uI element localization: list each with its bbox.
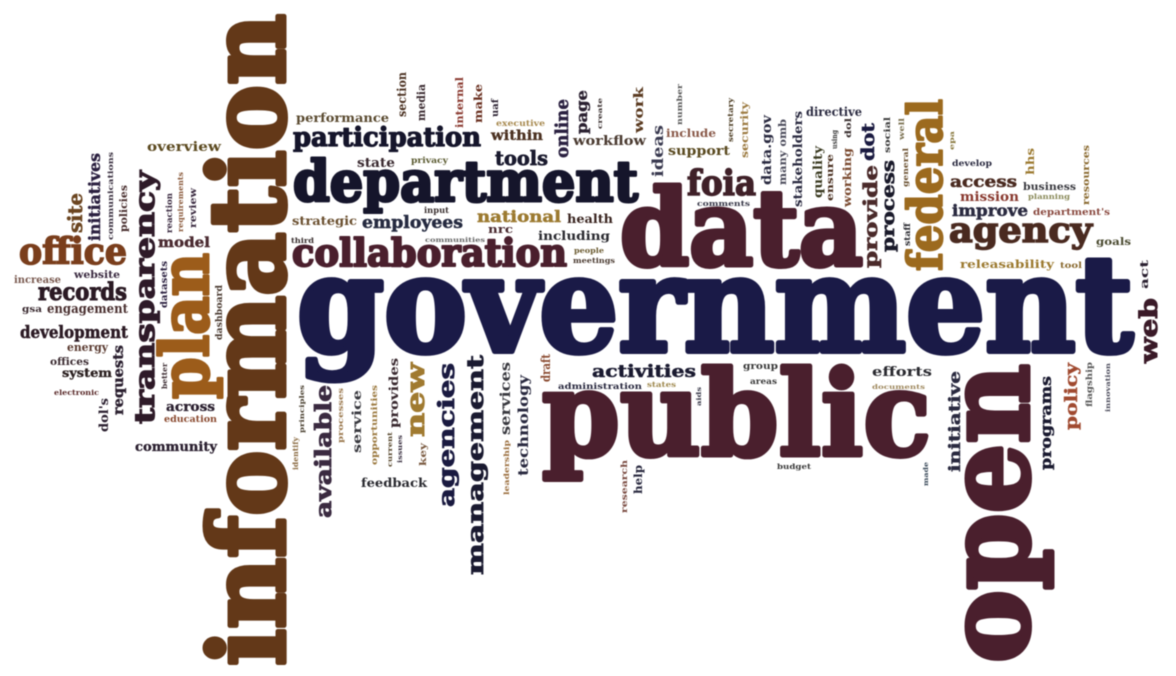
word: development: development (20, 323, 128, 343)
word: feedback: feedback (361, 476, 428, 490)
word: administration: administration (558, 381, 642, 391)
word: agency: agency (949, 210, 1094, 251)
word: national: national (477, 207, 561, 226)
word: datasets: datasets (160, 261, 170, 308)
word: tools: tools (495, 146, 548, 170)
word: process: process (878, 160, 899, 252)
word: management: management (463, 354, 489, 575)
word: opportunities: opportunities (369, 384, 379, 465)
word: online: online (552, 99, 573, 158)
word: processes: processes (336, 388, 345, 443)
word: provide: provide (860, 165, 882, 268)
word: programs: programs (1037, 376, 1055, 470)
word: aids: aids (696, 386, 703, 406)
word: using: using (830, 130, 839, 149)
word: budget: budget (777, 462, 812, 471)
word: efforts: efforts (872, 365, 932, 380)
word: collaboration: collaboration (292, 230, 567, 275)
word: comments: comments (697, 199, 750, 208)
word: communications: communications (106, 152, 115, 240)
word: gsa: gsa (22, 305, 42, 315)
word: system: system (62, 366, 112, 380)
word: increase: increase (14, 275, 61, 286)
word: government: government (297, 227, 1133, 383)
word: requirements: requirements (176, 172, 185, 232)
word: create: create (597, 98, 604, 129)
word: identify: identify (291, 436, 300, 470)
word: support: support (668, 144, 730, 159)
word: department: department (293, 149, 638, 215)
word: principles: principles (299, 384, 306, 433)
word: internal: internal (455, 77, 466, 128)
word: directive: directive (806, 105, 862, 119)
word: plan: plan (146, 253, 224, 399)
word: community: community (135, 440, 217, 455)
word: states: states (647, 380, 676, 389)
word: people: people (574, 246, 605, 255)
word: develop: develop (952, 158, 992, 168)
word: agencies: agencies (434, 363, 460, 507)
word: work: work (632, 86, 647, 134)
word: mission: mission (960, 190, 1020, 205)
word: public: public (542, 345, 931, 483)
word: initiative: initiative (945, 371, 964, 472)
word: include: include (666, 127, 716, 140)
word: electronic: electronic (54, 388, 99, 397)
word: areas: areas (750, 376, 778, 386)
word: ideas: ideas (649, 125, 667, 177)
word: uaf: uaf (491, 98, 501, 117)
word: stakeholders: stakeholders (791, 111, 805, 207)
word: within: within (490, 128, 543, 144)
word: activities: activities (592, 362, 696, 382)
word: working: working (841, 148, 854, 208)
word: staff: staff (902, 223, 912, 246)
word: department's: department's (1033, 208, 1110, 218)
word: policy: policy (1062, 362, 1082, 430)
word: issues: issues (397, 434, 404, 463)
word: performance: performance (296, 111, 389, 125)
word: services: services (498, 362, 514, 435)
word: new: new (401, 361, 430, 437)
word: including: including (538, 229, 611, 243)
word: current: current (387, 432, 394, 467)
word: flagship: flagship (1084, 361, 1094, 407)
word: state: state (357, 156, 395, 171)
word: goals: goals (1096, 237, 1131, 248)
word: innovation: innovation (1105, 362, 1112, 412)
word: input: input (424, 205, 449, 215)
word: social: social (882, 117, 892, 153)
word: key: key (419, 442, 429, 466)
word: quality: quality (811, 145, 825, 198)
word: communities: communities (425, 237, 486, 244)
word: records: records (38, 277, 127, 306)
word: employees: employees (362, 213, 463, 233)
word: privacy: privacy (411, 155, 448, 165)
word: open: open (921, 364, 1055, 663)
word: planning: planning (1028, 192, 1070, 201)
word: dol: dol (843, 118, 853, 138)
word: federal: federal (898, 99, 954, 271)
word: policies: policies (119, 185, 130, 232)
word: provides: provides (387, 358, 401, 428)
word: site: site (63, 193, 87, 233)
word: foia: foia (687, 163, 756, 204)
word: reaction: reaction (164, 193, 174, 233)
word: improve: improve (952, 201, 1028, 220)
word: data: data (620, 166, 863, 290)
word: made: made (923, 462, 930, 486)
word: dashboard: dashboard (215, 284, 225, 340)
word: meetings: meetings (573, 256, 615, 265)
word: documents: documents (872, 384, 926, 391)
word: many omb: many omb (778, 119, 789, 185)
word: research: research (619, 460, 629, 513)
word: data.gov: data.gov (760, 115, 775, 185)
word: dot: dot (858, 122, 879, 161)
word: general: general (901, 148, 910, 187)
word: media: media (415, 84, 428, 121)
word: education: education (164, 415, 217, 425)
word: across: across (166, 400, 215, 415)
word: health: health (567, 212, 613, 226)
word: releasability: releasability (960, 258, 1055, 271)
word: better: better (160, 363, 169, 389)
word: leadership: leadership (502, 440, 511, 495)
word: epa: epa (949, 131, 956, 150)
word: well: well (897, 118, 906, 141)
word: draft: draft (539, 354, 553, 382)
word: business: business (1023, 182, 1076, 193)
word: resources: resources (1082, 145, 1092, 205)
word: workflow: workflow (572, 134, 647, 149)
word: help: help (632, 465, 645, 494)
word: technology: technology (516, 374, 532, 476)
word: requests: requests (111, 345, 127, 415)
word: secretary: secretary (726, 97, 735, 142)
word: tool: tool (1060, 260, 1082, 270)
word: model: model (158, 235, 210, 251)
word: make: make (472, 84, 485, 123)
word: access: access (950, 172, 1017, 191)
word: overview: overview (147, 140, 222, 155)
word: security: security (740, 101, 751, 158)
word: engagement: engagement (47, 302, 128, 317)
word: ensure: ensure (826, 154, 836, 201)
word: web: web (1134, 298, 1163, 364)
word: website: website (73, 270, 120, 281)
word: offices: offices (50, 357, 89, 368)
word: group: group (743, 362, 778, 372)
word: energy: energy (67, 341, 109, 354)
word: nrc: nrc (488, 223, 513, 236)
word: number: number (675, 84, 684, 125)
word: office: office (19, 231, 127, 273)
word: executive: executive (496, 118, 545, 128)
word: participation: participation (293, 123, 481, 153)
word: available: available (311, 385, 337, 518)
word: dol's: dol's (97, 398, 111, 432)
word: third: third (291, 236, 314, 245)
word: hhs: hhs (1024, 148, 1037, 175)
word: page: page (573, 90, 591, 134)
word: section: section (395, 72, 409, 117)
word: service: service (350, 390, 364, 453)
word: review: review (189, 188, 199, 228)
word: initiatives: initiatives (85, 153, 104, 241)
word: transparency: transparency (130, 169, 161, 424)
word: strategic: strategic (292, 214, 357, 228)
word: act: act (1138, 259, 1151, 289)
